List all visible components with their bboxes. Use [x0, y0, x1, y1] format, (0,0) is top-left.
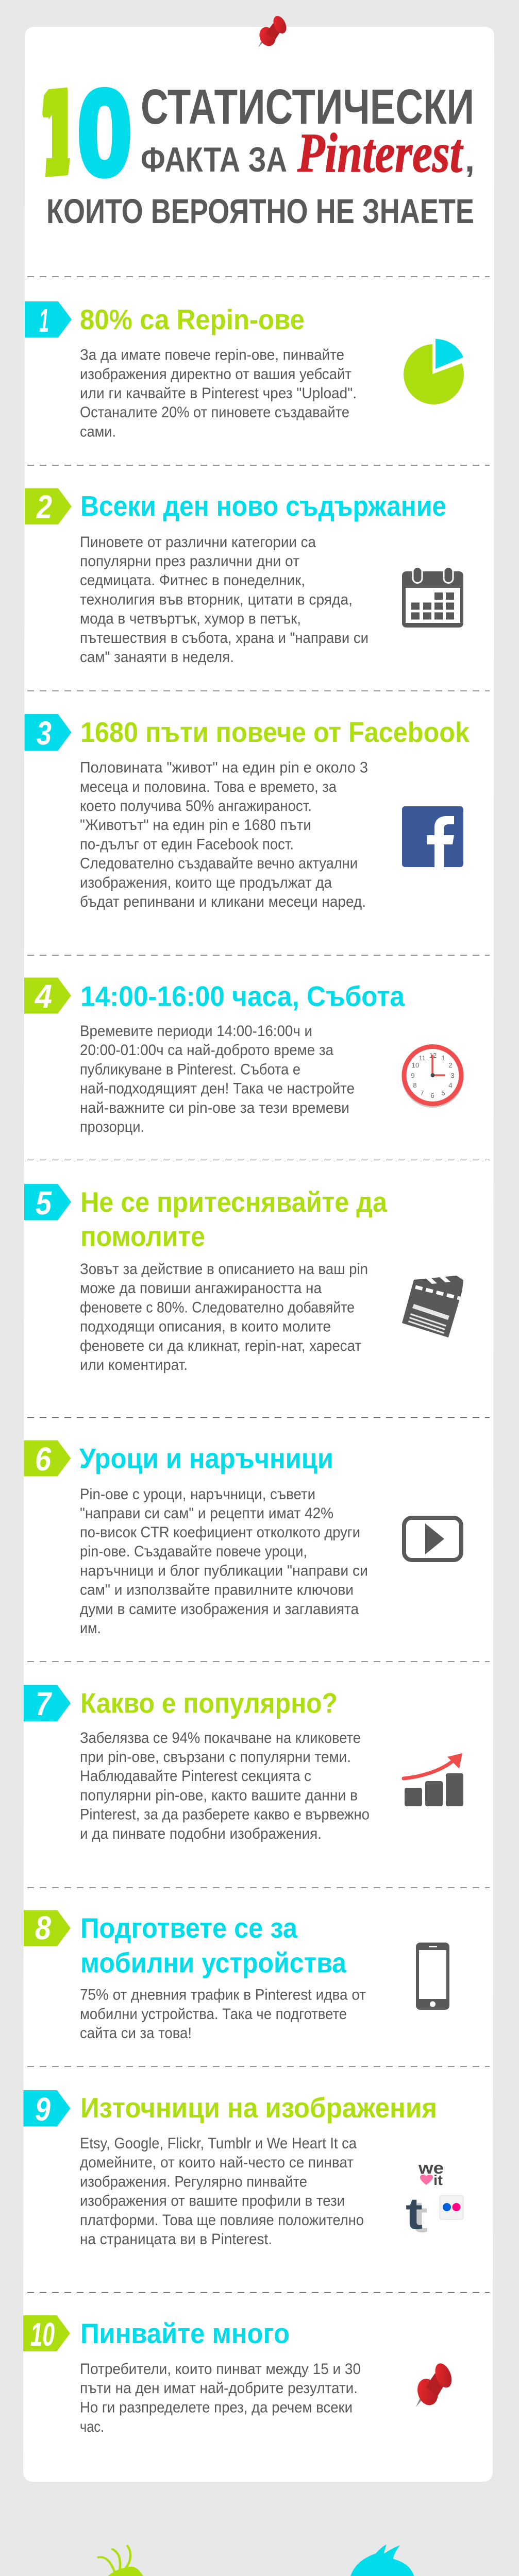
icon: clock: 11: [418, 1054, 426, 1062]
badge 8: 8: [35, 1909, 51, 1946]
body 2: Пиновете от различни категории са: [80, 534, 316, 551]
icon: clock: 2: [448, 1061, 453, 1069]
body 2: сам" занаяти в неделя.: [80, 649, 234, 666]
Pinterest wordmark: Pinterest: [297, 123, 463, 184]
body 9: [80, 2135, 364, 2248]
heading 2: Всеки ден ново съдържание: [80, 490, 446, 522]
body 6: думи в самите изображения и заглавията: [80, 1601, 359, 1618]
section 2: [25, 488, 463, 666]
badge 5: 5: [36, 1184, 52, 1222]
body 5: феновете си да кликнат, repin-нат, харесат: [80, 1337, 361, 1354]
icon: phone: [416, 1942, 449, 2010]
body 6: сам" и използвайте правилните ключови: [80, 1582, 354, 1599]
icon: clock: 7: [420, 1089, 424, 1097]
body 2: пътешествия в събота, храна и "направи си: [80, 630, 369, 647]
badge 4: 4: [34, 978, 52, 1015]
body 7: [80, 1730, 370, 1842]
body 2: технолигия във вторник, цитати в сряда,: [80, 591, 353, 608]
icon: we heart it: we: [418, 2159, 444, 2177]
icon: clock: 4: [448, 1081, 453, 1089]
badge 9: [24, 2090, 70, 2128]
icon: film clapper: [402, 1275, 463, 1337]
heading 5: [80, 1186, 387, 1252]
body 9: на страницата ви в Pinterest.: [80, 2231, 272, 2248]
body 9: домейните, от които най-често се пинват: [80, 2154, 354, 2171]
icon: we heart it: it: [433, 2172, 443, 2188]
icon: clock: 5: [441, 1089, 445, 1097]
body 6: им.: [80, 1620, 101, 1637]
body 8: сайта си за това!: [80, 2025, 192, 2042]
heading 8: Подгответе се за: [80, 1912, 297, 1944]
badge 3: 3: [37, 715, 52, 752]
icon: clock: 10: [412, 1061, 419, 1069]
section 10: [23, 2315, 455, 2435]
body 10: пъти на ден имат най-добрите резултати.: [80, 2380, 358, 2397]
body 6: [80, 1486, 368, 1637]
body 3: месеца и половина. Това е времето, за: [80, 778, 337, 795]
badge 3: [25, 714, 71, 752]
icon: pie chart: [404, 339, 464, 404]
body 1: или ги качвайте в Pinterest чрез "Upload".: [80, 385, 357, 402]
body 1: сами.: [80, 423, 116, 440]
body 3: по-дълъг от един Facebook пост.: [80, 836, 294, 853]
body 5: или коментират.: [80, 1357, 188, 1374]
body 4: най-подходящият ден! Така че настройте: [80, 1080, 355, 1097]
body 5: Зовът за действие в описанието на ваш pin: [80, 1261, 368, 1278]
icon: calendar: [402, 567, 463, 628]
heading 4: 14:00-16:00 часа, Събота: [80, 980, 405, 1012]
section 4: [24, 978, 464, 1136]
heading 6: Уроци и наръчници: [79, 1443, 333, 1475]
body 2: популярни през различни дни от: [80, 553, 299, 570]
badge 1: [25, 301, 72, 339]
body 6: Pin-ове с уроци, наръчници, съвети: [80, 1486, 315, 1503]
body 4: Времевите периоди 14:00-16:00ч и: [80, 1023, 312, 1040]
body 8: [80, 1987, 366, 2042]
icon: clock: 8: [413, 1081, 417, 1089]
body 9: платформи. Това ще повлияе положително: [80, 2212, 364, 2229]
section 9: [24, 2090, 463, 2248]
badge 6: 6: [35, 1440, 51, 1478]
body 7: Pinterest, за да разберете какво е вървежно: [80, 1806, 370, 1823]
body 4: прозорци.: [80, 1118, 144, 1136]
icon: clock: 9: [411, 1072, 415, 1079]
badge 2: [25, 488, 72, 526]
body 4: най-важните си pin-ове за тези времеви: [80, 1099, 349, 1116]
icon: clock: 6: [430, 1092, 434, 1099]
body 3: Половината "живот" на един pin е около 3: [80, 759, 368, 776]
badge 8: [24, 1909, 71, 1946]
body 8: 75% от дневния трафик в Pinterest идва от: [80, 1987, 366, 2004]
body 7: и да пинвате подобни изображения.: [80, 1825, 322, 1842]
body 7: Наблюдавайте Pinterest секцията с: [80, 1768, 311, 1785]
body 5: феновете с 80%. Следователно добавяйте: [80, 1299, 355, 1316]
body 1: Останалите 20% от пиновете създавайте: [80, 404, 349, 421]
body 2: [80, 534, 369, 666]
heading 8: мобилни устройства: [80, 1947, 346, 1979]
heading 3: 1680 пъти повече от Facebook: [80, 716, 470, 748]
body 7: Забелязва се 94% покачване на кликовете: [80, 1730, 361, 1747]
icon: tumblr: t: [411, 2192, 428, 2242]
section 5: [24, 1184, 463, 1374]
body 10: час.: [80, 2418, 104, 2435]
badge 2: 2: [36, 488, 52, 526]
body 9: Etsy, Google, Flickr, Tumblr и We Heart It са: [80, 2135, 357, 2152]
body 9: изображения от вашите профили в тези: [80, 2193, 345, 2210]
body 8: мобилни устройства. Така че подгответе: [80, 2006, 347, 2023]
body 4: 20:00-01:00ч са най-доброто време за: [80, 1042, 333, 1059]
section 1: [25, 301, 464, 440]
section 7: [24, 1685, 463, 1842]
body 5: подходящи описания, в които молите: [80, 1318, 331, 1335]
body 3: Следователно създавайте вечно актуални: [80, 855, 358, 872]
heading 9: Източници на изображения: [80, 2092, 437, 2124]
body 9: изображения. Регулярно пинвайте: [80, 2173, 307, 2190]
icon: we heart it: [418, 2159, 444, 2188]
title number 10: 1: [40, 59, 76, 207]
icon: clock: [402, 1046, 464, 1108]
body 2: мода в четвъртък, хумор в петък,: [80, 611, 301, 628]
title number 10: [42, 87, 130, 179]
heading 5: помолите: [80, 1220, 205, 1252]
badge 6: [24, 1440, 71, 1478]
badge 5: [24, 1184, 71, 1222]
body 4: [80, 1023, 355, 1136]
body 3: [80, 759, 368, 910]
character: green monster: [75, 2546, 183, 2576]
body 3: "Животът" на един pin е 1680 пъти: [80, 817, 311, 834]
body 6: pin-ове. Създавайте повече уроци,: [80, 1543, 307, 1560]
body 6: по-висок CTR коефициент отколкото други: [80, 1524, 360, 1541]
badge 4: [24, 978, 71, 1015]
body 10: Но ги разпределете през, да речем всеки: [80, 2399, 353, 2416]
body 3: бъдат репинвани и кликани месеци наред.: [80, 893, 366, 910]
section 6: [24, 1440, 461, 1637]
badge 7: [24, 1685, 71, 1722]
icon: facebook: [402, 806, 463, 867]
body 1: За да имате повече repin-ове, пинвайте: [80, 347, 344, 364]
body 5: може да повиши ангажираността на: [80, 1280, 322, 1297]
heading 5: Не се притеснявайте да: [80, 1186, 387, 1218]
body 7: при pin-ове, свързани с популярни теми.: [80, 1749, 351, 1766]
icon: rising chart: [404, 1753, 463, 1806]
icon: flickr: [440, 2195, 463, 2219]
title number 10: 0: [77, 65, 132, 201]
body 1: [80, 347, 357, 440]
badge 10: 10: [30, 2316, 55, 2353]
title: [42, 87, 473, 224]
icon: push pin: [414, 2361, 455, 2409]
icon: tumblr: [406, 2189, 428, 2242]
body 6: наръчници и блог публикации "направи си: [80, 1562, 368, 1579]
badge 1: 1: [39, 302, 49, 339]
body 4: публикуване в Pinterest. Събота е: [80, 1061, 300, 1078]
icon: top push pin: [257, 14, 289, 48]
heading 7: Какво е популярно?: [80, 1687, 338, 1719]
body 5: [80, 1261, 368, 1374]
icon: play button: [404, 1518, 461, 1560]
title line 2: ФАКТА ЗА: [141, 140, 287, 179]
badge 7: 7: [36, 1685, 53, 1722]
icon: clock: 3: [450, 1072, 455, 1079]
character: cyan monster: [323, 2545, 440, 2576]
body 10: Потребители, които пинват между 15 и 30: [80, 2361, 361, 2378]
icon: clock: 1: [441, 1054, 445, 1062]
body 6: "направи си сам" и рецепти имат 42%: [80, 1505, 333, 1522]
section 3: [25, 714, 470, 910]
body 2: седмицата. Фитнес в понеделник,: [80, 572, 305, 589]
body 3: което получива 50% ангажираност.: [80, 798, 312, 815]
icon: tumblr: t: [406, 2189, 423, 2239]
body 1: изображения директно от вашия уебсайт: [80, 366, 351, 383]
body 3: изображения, които ще продължат да: [80, 874, 332, 891]
section 8: [24, 1909, 449, 2042]
heading 8: [80, 1912, 346, 1979]
heading 1: 80% са Repin-ове: [80, 303, 305, 335]
badge 9: 9: [35, 2091, 51, 2128]
body 7: популярни pin-ове, както вашите данни в: [80, 1787, 358, 1804]
title comma: ,: [465, 140, 475, 179]
heading 10: Пинвайте много: [80, 2317, 290, 2349]
body 10: [80, 2361, 361, 2435]
icon: clock: 12: [429, 1052, 437, 1059]
